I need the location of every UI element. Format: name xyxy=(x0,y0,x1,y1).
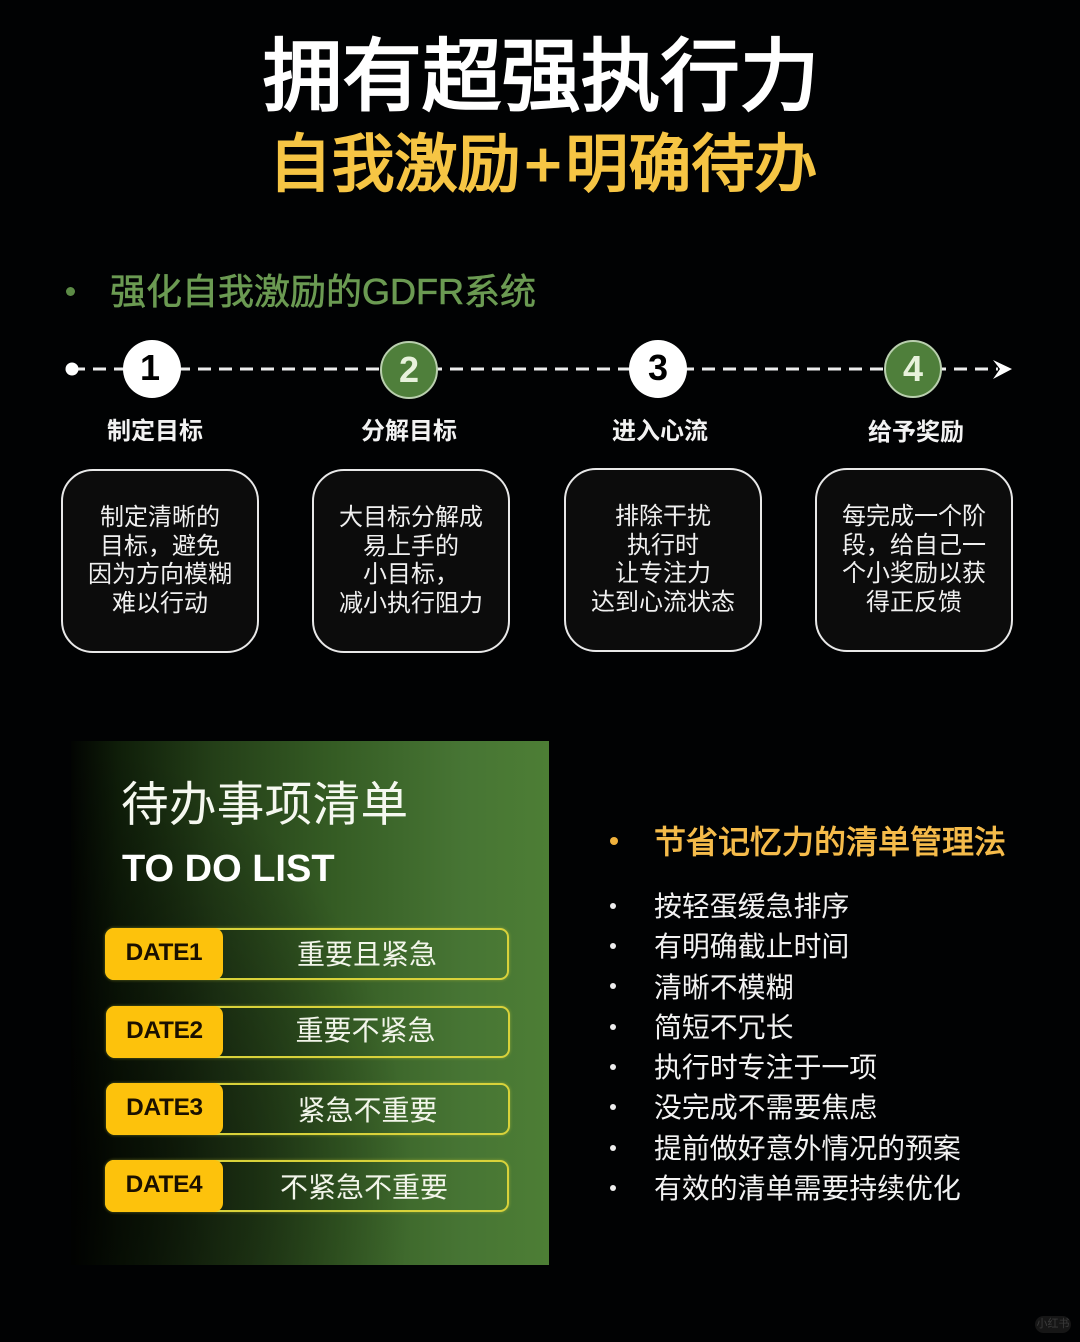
card: step 2: 大目标分解成 xyxy=(339,504,483,531)
step 3 number: 3 xyxy=(648,347,668,388)
item 6: 没完成不需要焦虑 xyxy=(654,1092,877,1123)
step 3 number xyxy=(629,340,687,398)
item 2: 有明确截止时间 xyxy=(654,931,849,962)
bullet 1 xyxy=(610,903,616,909)
card: step 2 xyxy=(312,469,510,653)
item 7: 提前做好意外情况的预案 xyxy=(654,1133,961,1164)
row 3 text: 紧急不重要 xyxy=(297,1095,438,1126)
date tag 2 xyxy=(106,1006,223,1058)
card: step 1: 难以行动 xyxy=(112,590,208,617)
date tag 4 xyxy=(105,1160,223,1212)
card: step 1 xyxy=(61,469,259,653)
bullet 3 xyxy=(610,983,616,989)
step 1 label: 制定目标 xyxy=(107,418,203,445)
bullet list xyxy=(610,891,961,1204)
date tag 2: DATE2 xyxy=(126,1017,203,1044)
card: step 3 xyxy=(564,468,762,652)
row 2 text: 重要不紧急 xyxy=(295,1015,436,1046)
step 1 number: 1 xyxy=(140,347,160,388)
section heading: checklist method xyxy=(610,824,1006,860)
item 1: 按轻蛋缓急排序 xyxy=(654,891,849,922)
watermark xyxy=(1035,1316,1071,1333)
date tag 4: DATE4 xyxy=(126,1171,202,1198)
panel: to do list xyxy=(71,741,549,1265)
subtitle: 自我激励+明确待办 xyxy=(269,130,817,200)
row 3 xyxy=(106,1083,510,1135)
step 2 number: 2 xyxy=(399,349,419,390)
card: step 2: 易上手的 xyxy=(363,533,459,560)
card: step 3: 让专注力 xyxy=(615,560,711,587)
bullet 4 xyxy=(610,1024,616,1030)
item 5: 执行时专注于一项 xyxy=(654,1052,877,1083)
dashed arrow line xyxy=(66,360,1012,379)
card: step 1: 目标，避免 xyxy=(100,533,220,560)
row 4 xyxy=(105,1160,509,1212)
bullet 2 xyxy=(610,943,616,949)
step 1 number xyxy=(123,340,181,398)
panel title english: TO DO LIST xyxy=(122,848,335,890)
step 2 number xyxy=(380,341,438,399)
bullet 6 xyxy=(610,1104,616,1110)
step 4 number xyxy=(884,340,942,398)
item 8: 有效的清单需要持续优化 xyxy=(654,1173,961,1204)
section heading: GDFR system xyxy=(66,271,536,312)
date tag 1 xyxy=(105,928,223,980)
item 3: 清晰不模糊 xyxy=(654,972,793,1003)
card: step 3: 排除干扰 xyxy=(615,503,711,530)
row 1 xyxy=(105,928,509,980)
bullet 5 xyxy=(610,1064,616,1070)
card: step 3: 执行时 xyxy=(627,532,699,559)
date tag 1: DATE1 xyxy=(126,939,202,966)
row 1 text: 重要且紧急 xyxy=(297,939,437,970)
heading bullet xyxy=(66,287,75,296)
timeline with numbered steps xyxy=(66,340,1012,399)
date tag 3 xyxy=(106,1083,223,1135)
card: step 1: 因为方向模糊 xyxy=(88,561,232,588)
title: 拥有超强执行力 xyxy=(263,32,819,121)
card: step 4: 个小奖励以获 xyxy=(842,560,986,587)
heading text: 强化自我激励的GDFR系统 xyxy=(110,271,536,312)
card: step 1: 制定清晰的 xyxy=(100,504,220,531)
bullet 8 xyxy=(610,1185,616,1191)
step 2 label: 分解目标 xyxy=(361,418,457,445)
heading bullet xyxy=(610,837,618,845)
card: step 2: 小目标， xyxy=(363,561,459,588)
card: step 3: 达到心流状态 xyxy=(591,589,735,616)
bullet 7 xyxy=(610,1145,616,1151)
row 2 xyxy=(106,1006,510,1058)
card: step 4: 段，给自己一 xyxy=(842,532,986,559)
step 4 label: 给予奖励 xyxy=(868,419,964,446)
step 3 label: 进入心流 xyxy=(612,418,708,445)
row 4 text: 不紧急不重要 xyxy=(280,1172,448,1203)
heading text: 节省记忆力的清单管理法 xyxy=(654,824,1006,860)
date tag 3: DATE3 xyxy=(126,1094,203,1121)
card: step 2: 减小执行阻力 xyxy=(339,590,483,617)
step 4 number: 4 xyxy=(903,348,923,389)
item 4: 简短不冗长 xyxy=(654,1012,793,1043)
card: step 4: 每完成一个阶 xyxy=(842,503,986,530)
card: step 4: 得正反馈 xyxy=(866,589,962,616)
panel title chinese: 待办事项清单 xyxy=(121,779,408,832)
watermark: 小红书 xyxy=(1036,1318,1070,1330)
card: step 4 xyxy=(815,468,1013,652)
